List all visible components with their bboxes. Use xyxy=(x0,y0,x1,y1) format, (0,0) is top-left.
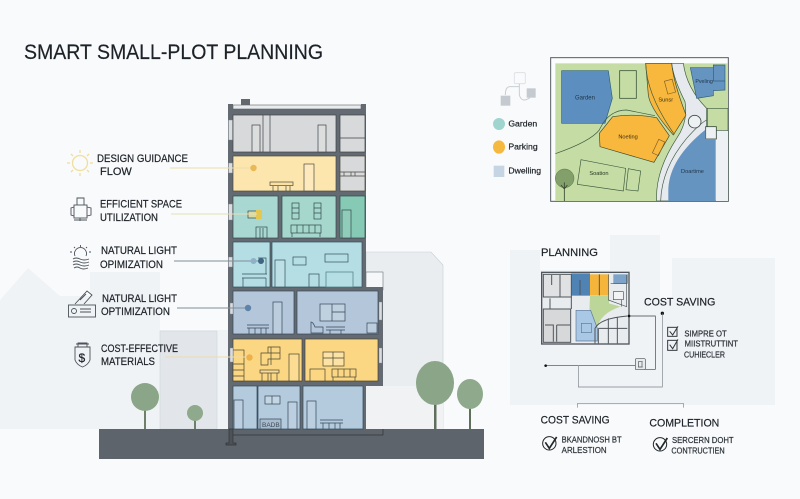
marker dots xyxy=(250,258,264,264)
label: natural light opimization: OPIMIZATION xyxy=(100,259,163,271)
block: cost saving: ARLESTION xyxy=(562,445,607,455)
icon: sun over water xyxy=(70,245,91,269)
tree: small left xyxy=(187,405,203,429)
floor 5 blue rooms xyxy=(233,291,378,334)
feature list xyxy=(67,150,264,368)
foundation xyxy=(226,429,236,445)
checklist text: CUHIECLER xyxy=(684,349,725,359)
label: design guidance flow: DESIGN GUIDANCE xyxy=(97,153,188,165)
icon: sun xyxy=(67,150,93,176)
block: completion: SERCERN DOHT xyxy=(672,435,734,445)
leader line xyxy=(177,307,246,309)
road centre line xyxy=(661,120,707,201)
check icon xyxy=(543,437,557,450)
icon: workstation xyxy=(71,198,91,221)
block: completion: CONTRUCTIEN xyxy=(671,445,725,455)
block: cost saving: COST SAVING xyxy=(541,415,610,427)
parking block top: Sunsr xyxy=(658,98,673,104)
dwelling bottom right xyxy=(668,130,716,201)
label: natural light optimization: NATURAL LIGHT xyxy=(102,293,177,305)
roof xyxy=(233,105,361,109)
parking block top xyxy=(646,63,686,135)
floor slab line xyxy=(233,429,383,435)
lawn patch right xyxy=(707,108,728,130)
map tree xyxy=(555,169,574,201)
icon: money shield: $ xyxy=(78,351,86,365)
dwelling top right: Pveling xyxy=(695,79,713,85)
marker dot xyxy=(245,305,251,311)
roundabout xyxy=(688,115,701,128)
block: cost saving: BKANDNOSH BT xyxy=(562,434,622,444)
garden block: Garden xyxy=(575,96,595,102)
background neighbouring building xyxy=(366,252,443,429)
icon: ticket card xyxy=(68,291,96,317)
legend: garden xyxy=(493,118,537,130)
label: natural light opimization: NATURAL LIGHT xyxy=(101,245,177,257)
label: cost-effective materials: COST-EFFECTIVE xyxy=(101,343,178,355)
windows on walls xyxy=(228,120,382,363)
block: cost saving xyxy=(541,415,622,455)
checkbox icons xyxy=(668,326,678,350)
lawn plot small xyxy=(626,169,641,191)
tree: far left xyxy=(131,383,159,429)
heading: planning: PLANNING xyxy=(541,247,598,259)
label on ground floor furniture: BADB xyxy=(262,422,280,429)
label: efficient space utilization: EFFICIENT SPACE xyxy=(100,198,182,210)
icon: money shield xyxy=(75,343,90,367)
label: efficient space utilization: UTILIZATION xyxy=(100,212,158,224)
road xyxy=(657,63,728,201)
square node xyxy=(706,127,716,139)
floor 4 light blue rooms xyxy=(233,242,362,287)
connector lines xyxy=(544,312,683,408)
connector node icon xyxy=(635,359,645,370)
building section xyxy=(226,99,383,445)
legend and site map xyxy=(493,58,728,201)
chimney xyxy=(241,99,250,106)
floor 3 teal rooms xyxy=(233,196,365,238)
marker dot xyxy=(246,354,253,361)
site map xyxy=(551,58,728,201)
parking block middle xyxy=(599,115,669,162)
background block left of building xyxy=(160,331,217,429)
label: design guidance flow: FLOW xyxy=(100,166,132,178)
legend: garden: Garden xyxy=(508,118,537,128)
planning panel xyxy=(541,247,738,455)
tree: small right xyxy=(457,379,483,429)
block: completion xyxy=(649,418,734,455)
floor 6 yellow rooms xyxy=(233,339,378,381)
building shell xyxy=(228,104,383,429)
leader line xyxy=(171,213,257,215)
leader line xyxy=(165,356,248,358)
lawn xyxy=(555,63,728,201)
feature: natural light opimization xyxy=(70,245,264,271)
checklist xyxy=(668,326,738,359)
legend: parking xyxy=(493,140,538,154)
checklist text: SIMPRE OT xyxy=(684,329,727,339)
legend: parking: Parking xyxy=(508,142,538,152)
floor 7 ground floor rooms xyxy=(233,386,363,429)
check icon xyxy=(653,438,667,451)
label: cost-effective materials: MATERIALS xyxy=(101,356,155,368)
label: natural light optimization: OPTIMIZATION xyxy=(101,306,170,318)
parking block middle: Noeting xyxy=(618,135,638,141)
leader line xyxy=(170,167,253,169)
background city silhouettes xyxy=(0,235,775,429)
lawn plot xyxy=(620,71,636,98)
legend connector icon xyxy=(501,73,536,106)
paths xyxy=(555,63,674,154)
lawn plot: section xyxy=(577,160,626,191)
feature: cost-effective materials xyxy=(75,343,253,368)
title: SMART SMALL-PLOT PLANNING xyxy=(24,41,323,64)
block: completion: COMPLETION xyxy=(649,418,719,430)
checklist text: MIISTRUTTINT xyxy=(685,339,738,349)
garden block xyxy=(562,71,612,123)
feature: natural light optimization xyxy=(68,291,251,318)
lawn plot: section: Soation xyxy=(589,171,609,177)
legend: dwelling: Dwelling xyxy=(508,165,541,175)
white plot right xyxy=(716,131,728,201)
leader line xyxy=(174,260,258,262)
feature: design guidance flow xyxy=(67,150,257,178)
tree: large right xyxy=(416,361,454,429)
legend: dwelling xyxy=(494,165,541,177)
floor 2 yellow room xyxy=(233,156,365,191)
feature: efficient space utilization xyxy=(71,198,257,224)
ground xyxy=(99,429,484,459)
dwelling top right xyxy=(690,65,725,98)
heading: cost saving: COST SAVING xyxy=(644,297,715,309)
mini floor plan xyxy=(542,272,629,344)
marker dot xyxy=(250,165,257,171)
dwelling bottom right: Doartime xyxy=(681,169,704,175)
floor 1 grey rooms xyxy=(233,115,365,152)
